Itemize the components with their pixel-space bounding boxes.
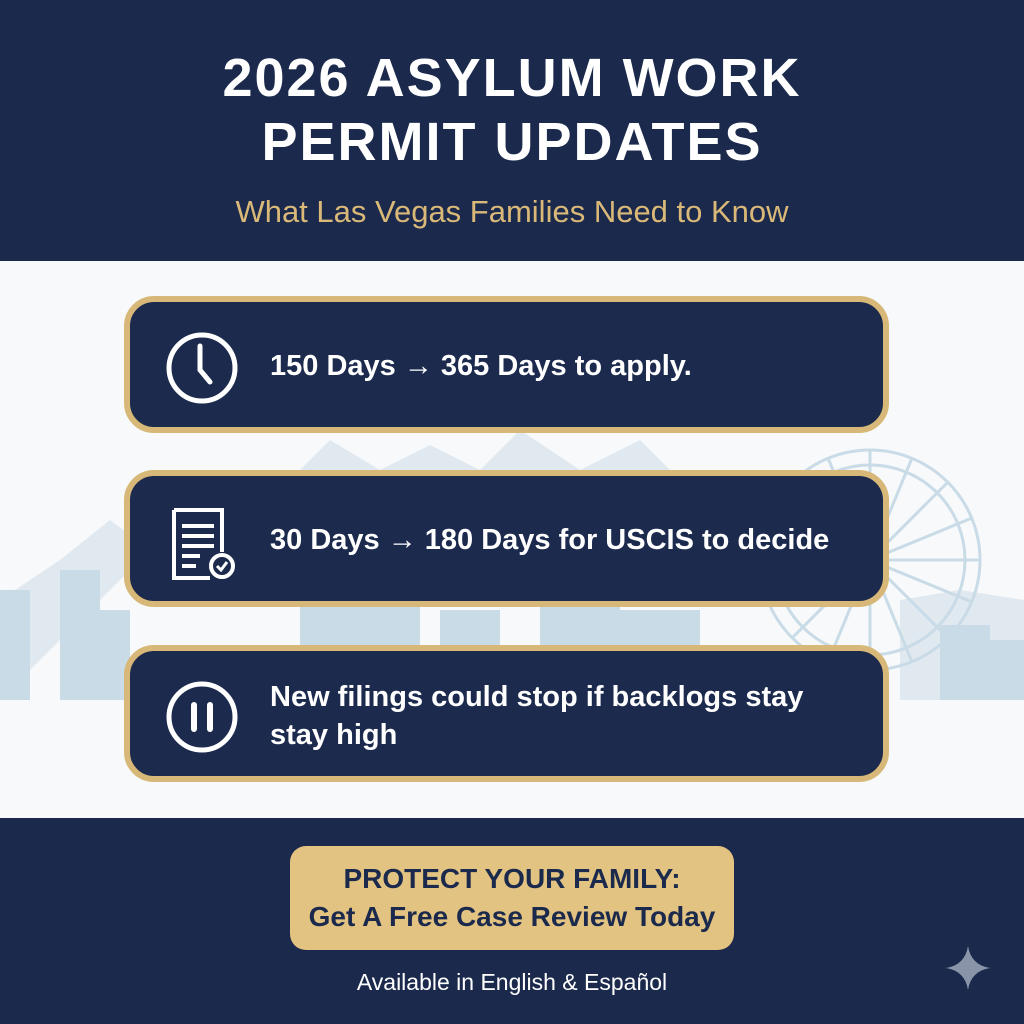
skyline background: [0, 433, 1024, 700]
card 3: filing pause: [124, 645, 889, 782]
icon: pause: [166, 682, 238, 752]
card 2: decision time: [124, 470, 889, 607]
icon: ferris wheel: [760, 450, 980, 670]
card 1: application window: [124, 296, 889, 433]
text: 150 Days → 365 Days to apply.: [270, 350, 692, 382]
text: New filings could stop if backlogs stay: [270, 681, 803, 713]
icon: document check: [172, 508, 235, 580]
text: stay high: [270, 719, 397, 751]
header band: [0, 0, 1024, 261]
CTA button: PROTECT YOUR FAMILY:: [343, 863, 681, 894]
subtitle: What Las Vegas Families Need to Know: [235, 194, 789, 229]
text: 30 Days → 180 Days for USCIS to decide: [270, 524, 829, 556]
CTA button: [290, 846, 734, 950]
CTA button: Get A Free Case Review Today: [309, 901, 715, 932]
icon: sparkle: [946, 946, 990, 990]
title: [222, 48, 802, 172]
footer band: [0, 818, 1024, 1024]
title: PERMIT UPDATES: [261, 112, 763, 172]
icon: clock: [166, 332, 238, 404]
languages note: Available in English & Español: [357, 969, 667, 995]
text: [270, 681, 804, 751]
title: 2026 ASYLUM WORK: [222, 48, 802, 108]
